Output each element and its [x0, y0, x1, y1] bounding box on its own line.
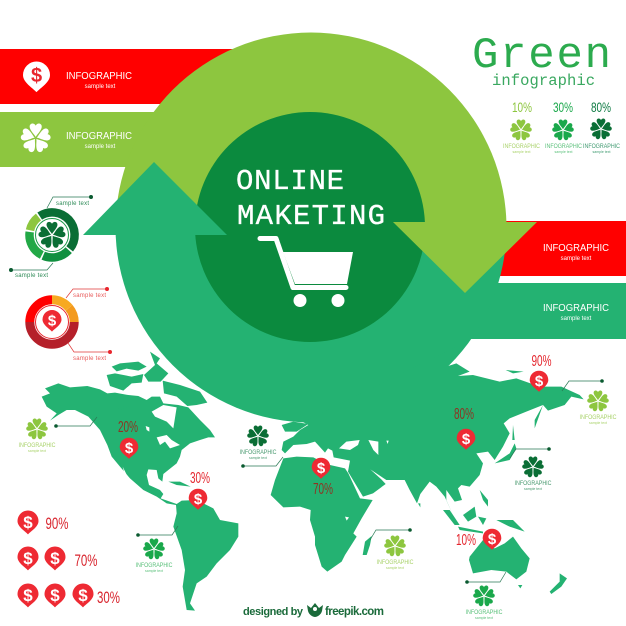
callout: madagascar clover: sample text [386, 566, 404, 570]
pin: 90 percent [530, 353, 552, 392]
stat: 30 percent clover [545, 99, 583, 154]
banner text: right teal [543, 303, 609, 322]
stat: 10 percent clover [503, 99, 541, 154]
legend row: 70 percent: 70% [74, 551, 98, 570]
icon: freepik crown [307, 603, 323, 617]
callout: pacific clover: INFOGRAPHIC [136, 563, 173, 569]
pin: 30 percent: 30% [190, 470, 210, 487]
legend row: 70 percent: $ [50, 549, 60, 568]
pin: 10 percent: $ [488, 531, 497, 548]
title: green infographic: Green [472, 31, 611, 81]
callout: upper sample text: sample text [56, 201, 89, 207]
callout: siberia clover: sample text [589, 421, 607, 425]
pin: 80 percent: 80% [454, 406, 474, 423]
callout: upper sample text: sample text [73, 293, 106, 299]
footer: designed by freepik [243, 603, 384, 618]
pin: 80 percent: $ [462, 431, 471, 448]
callout: pacific clover: sample text [145, 569, 163, 573]
pin: 70 percent [312, 458, 333, 498]
pin: 70 percent: $ [317, 460, 326, 477]
callout: atlantic clover [240, 425, 283, 468]
world map [42, 340, 584, 611]
map callouts: clovers with lines [18, 379, 617, 620]
callout: siberia clover [562, 379, 617, 425]
stat: 30 percent clover: 30% [553, 99, 573, 115]
legend row: 30 percent: $ [50, 586, 60, 605]
icon: red dollar pin: $ [48, 312, 57, 330]
ring: light green upper half [118, 32, 506, 222]
footer: designed by freepik: designed by [243, 606, 304, 618]
banner: top left red [0, 49, 240, 104]
callout: australia clover: INFOGRAPHIC [466, 610, 503, 616]
pin: 90 percent: 90% [532, 353, 552, 370]
arrow: teal head [83, 162, 227, 235]
legend: pin counts [18, 510, 120, 607]
legend row: 30 percent: $ [23, 586, 33, 605]
stat: 80 percent clover: INFOGRAPHIC [583, 144, 621, 150]
callout: atlantic clover: INFOGRAPHIC [240, 450, 277, 456]
stat: 80 percent clover: sample text [593, 150, 610, 154]
legend row: 90 percent [18, 510, 68, 534]
callout: siberia clover: INFOGRAPHIC [580, 415, 617, 421]
callout: japan clover: sample text [524, 487, 542, 491]
banner text [66, 71, 132, 90]
pin: 30 percent: $ [194, 491, 203, 508]
map: eurasia [282, 340, 584, 594]
stat: 10 percent clover: sample text [513, 150, 530, 154]
banner text: right red: sample text [561, 256, 592, 262]
map: americas [42, 352, 308, 611]
callout: australia clover [465, 572, 506, 620]
legend row: 30 percent: 30% [97, 588, 120, 607]
legend row: 30 percent: $ [78, 586, 88, 605]
callout: alaska clover: sample text [28, 449, 46, 453]
pin: 90 percent: $ [535, 373, 544, 390]
banner text: INFOGRAPHIC [66, 71, 132, 82]
callout: japan clover [510, 447, 552, 491]
stat: 10 percent clover: 10% [512, 99, 532, 115]
pin: 20 percent [118, 419, 138, 459]
pin: 70 percent: 70% [313, 481, 333, 498]
ring: teal lower half [116, 235, 505, 422]
icon: white clover [20, 124, 51, 153]
map: africa [271, 457, 373, 572]
legend row: 90 percent: 90% [46, 514, 68, 533]
banner text: right teal: INFOGRAPHIC [543, 303, 609, 314]
banner text: INFOGRAPHIC [66, 131, 132, 142]
pin: 10 percent [456, 529, 501, 550]
center dark green circle [195, 112, 425, 342]
callout: japan clover: INFOGRAPHIC [514, 481, 552, 487]
pin: 80 percent [454, 406, 475, 450]
callout: madagascar clover: INFOGRAPHIC [376, 560, 414, 566]
banner text: sample text [85, 84, 116, 90]
donut: red [30, 287, 112, 362]
banner text: right teal: sample text [561, 316, 592, 322]
stat: 80 percent clover: 80% [591, 99, 611, 115]
pin: 20 percent: $ [125, 440, 134, 457]
legend row: 30 percent [18, 584, 120, 607]
banner text: right red [543, 243, 609, 262]
pin: 20 percent: 20% [118, 419, 138, 436]
title: green infographic: infographic [492, 72, 595, 90]
heading: online maketing [236, 165, 385, 233]
map pins with percentages [118, 353, 552, 550]
icon: dollar pin white [23, 62, 50, 92]
heading: online maketing: MAKETING [237, 200, 385, 233]
banner text: sample text [85, 144, 116, 150]
icon: dark clover [38, 222, 66, 249]
heading: online maketing: ONLINE [236, 165, 344, 198]
stat: 30 percent clover: INFOGRAPHIC [545, 144, 583, 150]
callout: australia clover: sample text [475, 616, 493, 620]
callout: lower sample text: sample text [15, 273, 48, 279]
icon: shopping cart [260, 238, 353, 307]
donut: green [9, 195, 93, 279]
legend row: 70 percent [18, 546, 98, 570]
banner: left light green [0, 112, 200, 167]
stat: 80 percent clover [583, 99, 621, 154]
legend row: 70 percent: $ [23, 549, 33, 568]
banner: right red [440, 221, 626, 276]
footer: designed by freepik: freepik.com [325, 606, 384, 618]
icon: dollar pin white: $ [31, 65, 42, 87]
callout: madagascar clover [370, 528, 414, 570]
stat: 30 percent clover: sample text [555, 150, 572, 154]
pin: 30 percent [189, 470, 210, 510]
banner: right teal [440, 283, 626, 339]
callout: lower sample text: sample text [73, 356, 106, 362]
pin: 10 percent: 10% [456, 532, 476, 549]
callout: alaska clover: INFOGRAPHIC [18, 443, 56, 449]
callout: alaska clover [18, 417, 97, 453]
stat: 10 percent clover: INFOGRAPHIC [503, 144, 541, 150]
legend row: 90 percent: $ [23, 513, 33, 532]
callout: atlantic clover: sample text [249, 456, 267, 460]
banner text [66, 131, 132, 150]
callout: pacific clover [136, 526, 178, 573]
arrow: light green head [393, 222, 537, 293]
banner text: right red: INFOGRAPHIC [543, 243, 609, 254]
